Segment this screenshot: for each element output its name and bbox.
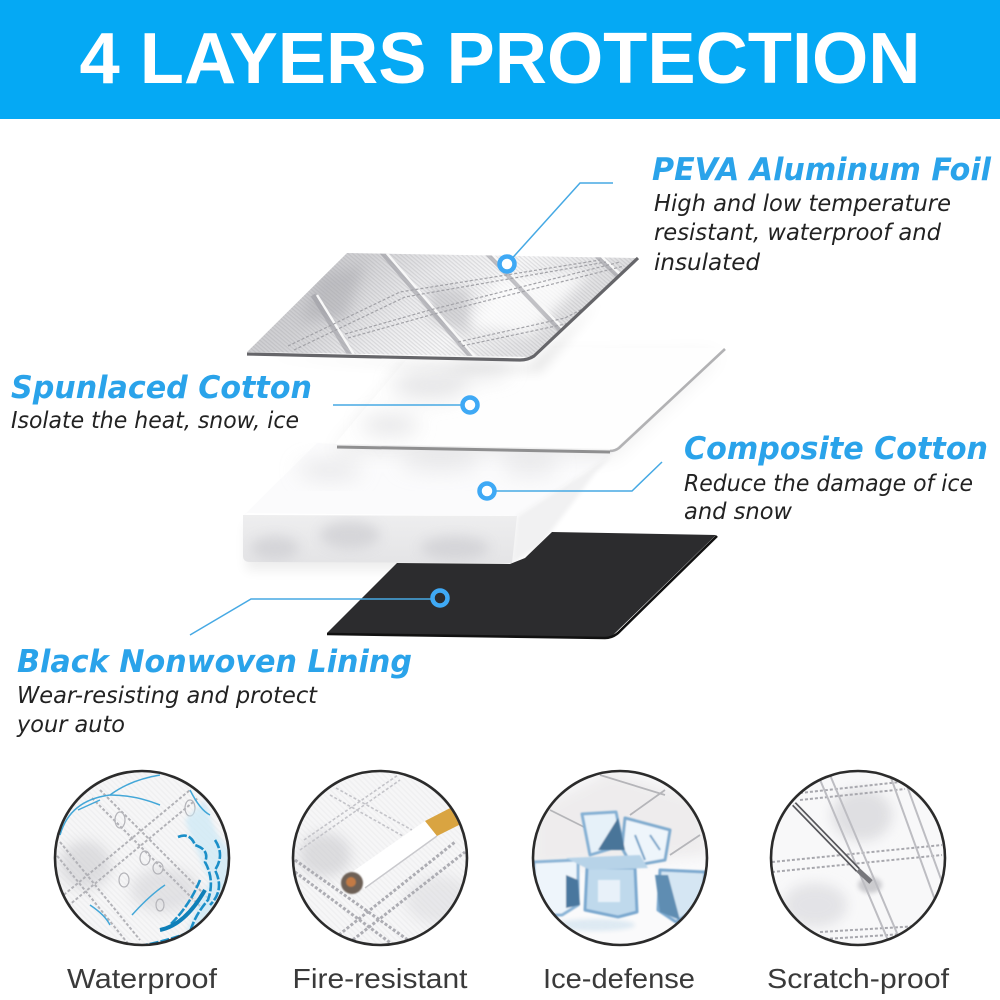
needle	[794, 804, 871, 882]
label: Fire-resistant	[292, 963, 468, 994]
leader line	[190, 599, 440, 635]
title banner	[0, 0, 1000, 119]
callout: PEVA aluminum foil	[500, 152, 991, 276]
feature: waterproof	[54, 770, 232, 994]
feature: fire-resistant	[292, 770, 474, 994]
description: Isolate the heat, snow, ice	[11, 408, 299, 434]
quilting seams	[288, 250, 626, 358]
description: resistant, waterproof and	[654, 220, 941, 246]
layer: PEVA aluminum foil	[247, 250, 640, 372]
callout: spunlaced cotton	[11, 370, 478, 434]
description	[654, 191, 951, 276]
description	[684, 471, 973, 525]
icon: ice cubes on foil	[532, 770, 708, 946]
layer: black nonwoven lining	[327, 532, 717, 638]
label: Waterproof	[67, 963, 217, 994]
description: Wear-resisting and protect	[17, 683, 318, 709]
callout: composite cotton	[480, 431, 988, 525]
leader line	[487, 462, 662, 491]
feature: ice-defense	[532, 770, 708, 994]
marker	[500, 256, 514, 272]
marker	[432, 590, 448, 606]
leader line	[333, 404, 470, 406]
description: and snow	[684, 499, 792, 525]
marker	[462, 398, 478, 412]
description: insulated	[654, 250, 760, 276]
cigarette	[341, 805, 461, 894]
layer: spunlaced cotton	[331, 347, 725, 458]
marker	[480, 484, 494, 498]
description: Reduce the damage of ice	[684, 471, 973, 497]
callout: black nonwoven lining	[16, 590, 448, 738]
title: 4 LAYERS PROTECTION	[80, 19, 920, 99]
ice cubes	[534, 812, 705, 922]
feature: scratch-proof	[767, 770, 949, 994]
leader line	[507, 183, 613, 264]
layer diagram	[243, 250, 725, 638]
label: Scratch-proof	[767, 963, 949, 994]
heading: Black Nonwoven Lining	[17, 644, 412, 680]
description: your auto	[16, 712, 125, 738]
icon: cigarette on foil	[292, 770, 474, 950]
heading: Spunlaced Cotton	[11, 370, 312, 406]
heading: Composite Cotton	[684, 431, 988, 467]
label: Ice-defense	[543, 963, 695, 994]
description: High and low temperature	[654, 191, 951, 217]
layer: composite cotton	[243, 443, 615, 570]
icon: needle on foil	[770, 770, 946, 946]
icon: water on foil	[54, 770, 232, 946]
description	[16, 683, 318, 738]
heading: PEVA Aluminum Foil	[652, 152, 991, 188]
